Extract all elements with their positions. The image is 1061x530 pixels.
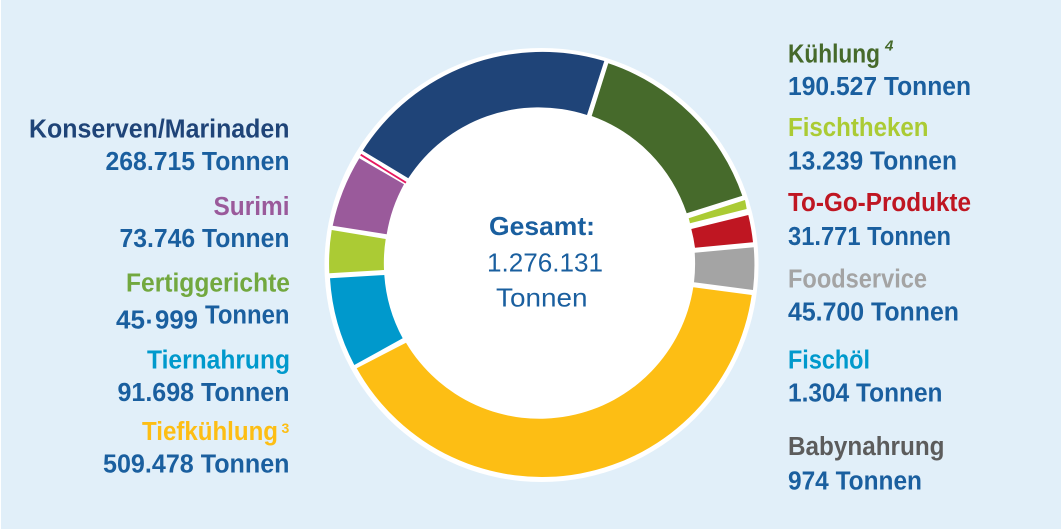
label: Babynahrung: Babynahrung (788, 433, 944, 461)
label: Foodservice (788, 265, 959, 327)
label: Kühlung (788, 38, 971, 101)
label: Foodservice: 45.700 Tonnen (788, 299, 959, 327)
label: To-Go-Produkte (788, 189, 971, 251)
label: Foodservice: Foodservice (788, 265, 927, 293)
label: Fertiggerichte: Tonnen (205, 302, 290, 330)
segment: Tiernahrung (330, 275, 403, 365)
label: Kühlung: 4 (884, 38, 894, 54)
label: Fischöl: 1.304 Tonnen (788, 380, 942, 408)
label: Konserven/Marinaden: 268.715 Tonnen (106, 148, 290, 176)
segment: To-Go-Produkte (691, 215, 753, 248)
label: Tiernahrung: Tiernahrung (147, 346, 290, 374)
label: Fertiggerichte: 45 (116, 306, 145, 334)
segment: Surimi (333, 158, 404, 234)
label: Fertiggerichte: . (146, 302, 152, 330)
label: Surimi: Surimi (214, 193, 290, 221)
center total: Tonnen (496, 283, 588, 313)
label: Kühlung: Kühlung (788, 40, 880, 68)
label: Tiefkühlung (103, 418, 290, 478)
label: Tiefkühlung: 509.478 Tonnen (103, 450, 290, 478)
label: To-Go-Produkte: 31.771 Tonnen (788, 223, 951, 251)
label: Tiefkühlung: Tiefkühlung (142, 418, 278, 446)
segment: Fischtheken (689, 200, 747, 223)
segment: Kühlung (592, 63, 742, 213)
segment: Foodservice (694, 247, 754, 290)
label: Tiernahrung (118, 346, 290, 407)
label: Fischöl (788, 346, 942, 408)
label: Fischtheken: 13.239 Tonnen (788, 147, 957, 175)
center total (487, 211, 603, 313)
label: Kühlung: 190.527 Tonnen (788, 73, 971, 101)
segment: sliver (361, 155, 406, 183)
label: Surimi (120, 193, 290, 253)
label: Konserven/Marinaden: Konserven/Marinaden (29, 116, 290, 144)
segment: Fertiggerichte (329, 230, 386, 273)
label: Konserven/Marinaden (29, 116, 290, 176)
label: Fertiggerichte: Fertiggerichte (126, 270, 290, 298)
label: To-Go-Produkte: To-Go-Produkte (788, 189, 971, 217)
label: Fischtheken (788, 114, 957, 175)
label: Tiefkühlung: 3 (282, 420, 290, 436)
label: Babynahrung: 974 Tonnen (788, 467, 922, 495)
label: Fischtheken: Fischtheken (788, 114, 928, 142)
center total: Gesamt: (489, 211, 595, 241)
label: Fertiggerichte: 999 (155, 306, 198, 334)
label: Fischöl: Fischöl (788, 346, 870, 374)
segment: Konserven/Marinaden (363, 52, 604, 178)
label: Tiernahrung: 91.698 Tonnen (118, 379, 290, 407)
label: Babynahrung (788, 433, 944, 495)
donut chart (324, 48, 758, 482)
label: Fertiggerichte (116, 270, 290, 334)
center total: 1.276.131 (487, 248, 603, 278)
label: Surimi: 73.746 Tonnen (120, 225, 290, 253)
segment: Tiefkühlung (357, 287, 752, 477)
